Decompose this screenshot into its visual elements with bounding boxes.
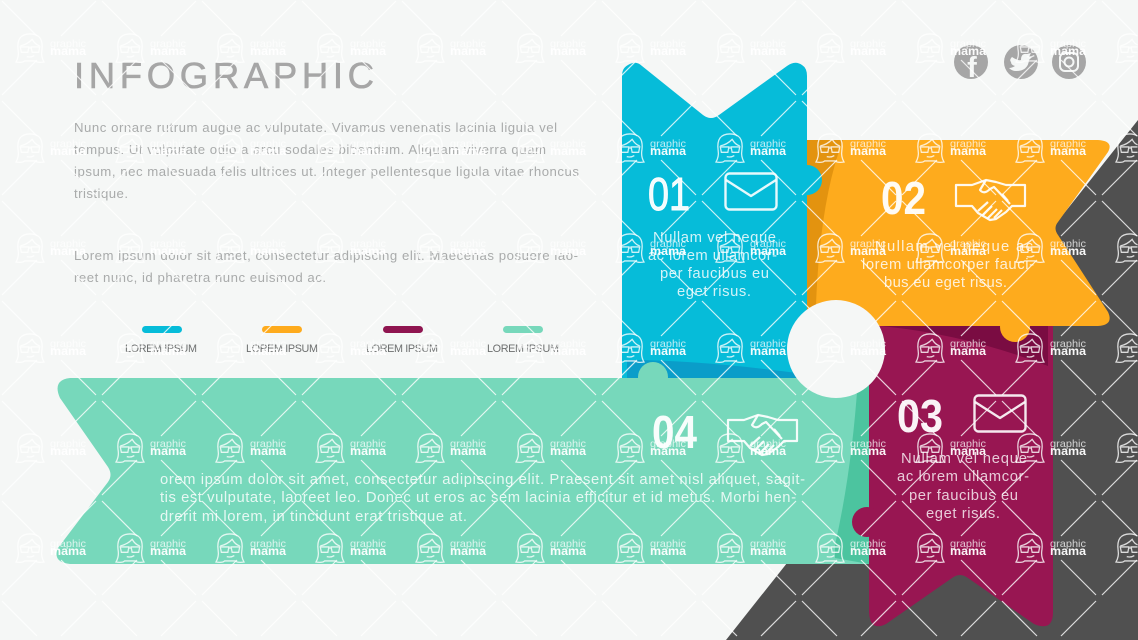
panel 01: blue ribbon (622, 63, 807, 380)
panel 03 text: per faucibus eu (909, 488, 1018, 504)
title: INFOGRAPHIC (74, 55, 374, 96)
number 04: 04 (652, 406, 697, 458)
panel 02 text: lorem ullamcorper fauci- (862, 257, 1034, 273)
panel 03 text (897, 451, 1029, 522)
tab: green connector (638, 362, 668, 392)
icon: twitter (1004, 45, 1038, 79)
panel 04 text (160, 472, 805, 525)
legend item: green: LOREM IPSUM (487, 343, 559, 355)
panel 01 text: per faucibus eu (660, 266, 769, 282)
icon: envelope 01 (726, 174, 776, 210)
intro text block: tristique. (74, 186, 128, 201)
panel 04 text: orem ipsum dolor sit amet, consectetur adipiscing elit. Praesent sit amet nisl aliquet, sagit- (160, 472, 805, 488)
panel 01 text (648, 230, 777, 300)
icon: handshake 02 (956, 180, 1025, 220)
icon: handshake 04 (728, 415, 797, 455)
legend item: blue (125, 326, 197, 355)
intro text block: Nunc ornare rutrum augue ac vulputate. Vivamus venenatis lacinia ligula vel (74, 120, 557, 135)
second text block (74, 248, 578, 285)
icon: instagram (1052, 45, 1086, 79)
dark grey corner triangle (726, 120, 1138, 640)
panel 01 text: ac lorem ullamcor- (648, 248, 777, 264)
panel 02: orange ribbon (807, 140, 1110, 326)
panel 02 text: Nullam vel neque ac (875, 239, 1034, 255)
legend item: orange: LOREM IPSUM (246, 343, 318, 355)
legend item: purple (366, 326, 438, 355)
panel 03: purple ribbon (869, 326, 1053, 626)
legend item: blue: LOREM IPSUM (125, 343, 197, 355)
tab: purple connector (852, 507, 882, 537)
panel 03 text: Nullam vel neque (901, 451, 1027, 467)
number 01: 01 (648, 168, 690, 220)
number 03: 03 (897, 390, 943, 442)
intro text block: tempus. Ut vulputate odio a arcu sodales bibendum. Aliquam viverra quam (74, 142, 546, 157)
second text block: Lorem ipsum dolor sit amet, consectetur adipiscing elit. Maecenas posuere lao- (74, 248, 578, 263)
panel 04 text: tis est vulputate, laoreet leo. Donec ut eros ac sem lacinia efficitur et id metus. Morbi hen- (160, 490, 796, 506)
social icons (954, 45, 1086, 84)
icon: facebook: f (967, 52, 977, 84)
second text block: reet nunc, id pharetra nunc euismod ac. (74, 270, 326, 285)
panel 03 text: eget risus. (926, 506, 1000, 522)
panel 04 text: drerit mi lorem, in tincidunt erat tristique at. (160, 509, 467, 525)
intro text block (74, 120, 579, 201)
legend (125, 326, 559, 355)
tab: blue connector (792, 165, 822, 195)
icon: envelope 03 (974, 396, 1026, 432)
number 02: 02 (881, 172, 926, 224)
panel 01 text: eget risus. (677, 284, 751, 300)
panel 02 text: bus eu eget risus. (884, 275, 1007, 291)
panel 02 text (862, 239, 1034, 291)
panel 01 text: Nullam vel neque (653, 230, 776, 246)
intro text block: ipsum, nec malesuada felis ultrices ut. Integer pellentesque ligula vitae rhoncus (74, 164, 579, 179)
tab: orange connector (1000, 312, 1030, 342)
legend item: green (487, 326, 559, 355)
legend item: purple: LOREM IPSUM (366, 343, 438, 355)
central white circle (787, 300, 885, 398)
panel 04: green ribbon (56, 378, 869, 564)
legend item: orange (246, 326, 318, 355)
panel 03 text: ac lorem ullamcor- (897, 469, 1029, 485)
